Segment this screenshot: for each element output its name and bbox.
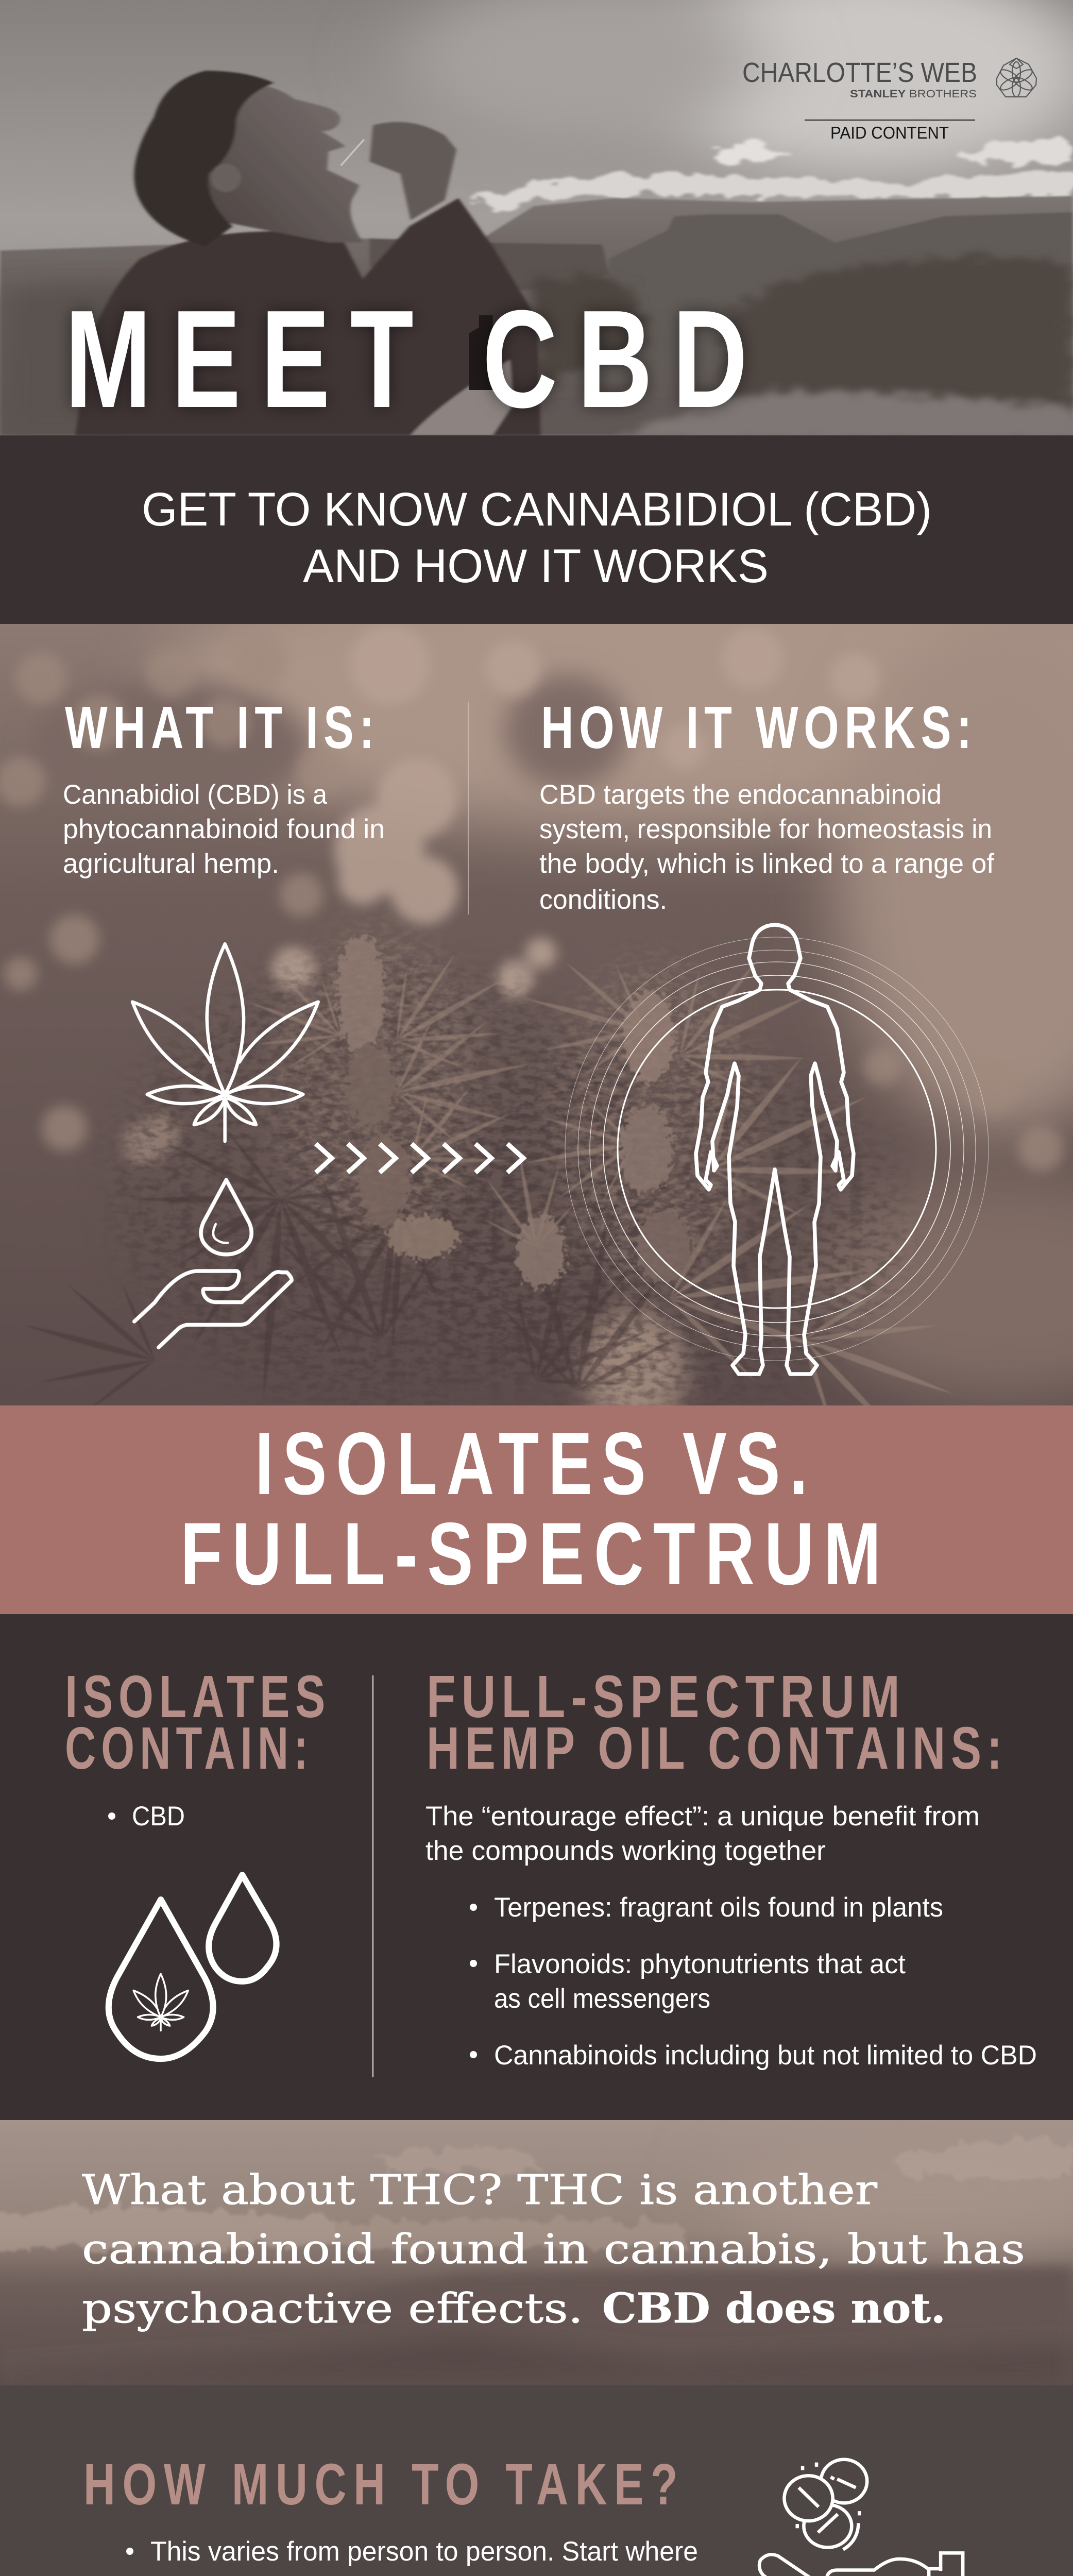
- panel: what about THC: cannabinoid found in cannabis, but has: [82, 2225, 1025, 2273]
- panel: what about THC: CBD does not.: [602, 2284, 946, 2332]
- heading: isolates contain: ISOLATES: [65, 1663, 331, 1730]
- heading: isolates contain: [65, 1663, 331, 1782]
- person silhouette: [75, 71, 541, 435]
- arrow: chevrons: [316, 1144, 523, 1173]
- text: what it is: agricultural hemp.: [63, 849, 279, 879]
- panel: hero photo: [0, 0, 1073, 440]
- text: entourage effect: The “entourage effect”: a unique benefit from: [425, 1801, 980, 1832]
- text: how it works: CBD targets the endocannabinoid: [539, 779, 942, 810]
- heading: isolates vs.: ISOLATES VS.: [255, 1414, 817, 1513]
- subtitle band: GET TO KNOW CANNABIDIOL (CBD): [142, 483, 932, 536]
- text: entourage effect: [425, 1801, 980, 1866]
- heading: full-spectrum: FULL-SPECTRUM: [180, 1504, 891, 1603]
- hemp plants: [113, 963, 649, 1406]
- text: what it is: Cannabidiol (CBD) is a: [63, 779, 327, 810]
- text: what it is: phytocannabinoid found in: [63, 814, 385, 844]
- panel: how much and how to take: [0, 2385, 1073, 2576]
- subtitle band: [0, 435, 1073, 624]
- bullet: how much: This varies from person to person. Start where: [150, 2536, 698, 2567]
- bullet: terpenes: Terpenes: fragrant oils found in plants: [494, 1892, 943, 1923]
- icon: Charlotte's Web emblem: [997, 58, 1036, 97]
- bullet: CBD: CBD: [132, 1801, 185, 1832]
- panel: what about THC: [0, 2120, 1073, 2385]
- panel: what about THC: What about THC? THC is another: [82, 2166, 878, 2214]
- logo: Charlotte's Web: [742, 57, 1036, 100]
- text: how it works: [539, 779, 994, 915]
- paid content label: PAID CONTENT: [830, 123, 949, 142]
- bullet: cannabinoids: Cannabinoids including but not limited to CBD: [494, 2040, 1037, 2071]
- title: MEET CBD: [65, 282, 768, 437]
- icon: human body with circles: [565, 925, 989, 1374]
- icon: oil drops with leaf: [109, 1875, 277, 2059]
- heading: full-spectrum hemp oil contains: [427, 1663, 1008, 1782]
- bullet: flavonoids: [470, 1949, 906, 2014]
- bullet: CBD: [108, 1801, 185, 1832]
- text: how it works: conditions.: [539, 885, 667, 915]
- heading: isolates contain: CONTAIN:: [65, 1715, 313, 1782]
- icon: oil drop in hand: [134, 1180, 292, 1347]
- bullet: flavonoids: as cell messengers: [494, 1984, 710, 2014]
- logo: Charlotte's Web: CHARLOTTE’S WEB: [742, 57, 977, 88]
- subtitle band: AND HOW IT WORKS: [303, 540, 769, 592]
- icon: pills over hand: [759, 2460, 963, 2576]
- text: what it is: [63, 779, 385, 879]
- heading: what it is: WHAT IT IS:: [65, 694, 380, 761]
- text: how it works: system, responsible for homeostasis in: [539, 814, 992, 844]
- panel: isolates vs full-spectrum banner: [0, 1405, 1073, 1614]
- panel: what it is / how it works photo: [0, 624, 1073, 1405]
- panel: isolates and full-spectrum details: [0, 1614, 1073, 2120]
- heading: full-spectrum hemp oil contains: FULL-SPECTRUM: [427, 1663, 906, 1730]
- panel: what about THC: psychoactive effects.: [82, 2284, 583, 2332]
- heading: how much to take: HOW MUCH TO TAKE?: [83, 2452, 685, 2517]
- bullet: flavonoids: Flavonoids: phytonutrients that act: [494, 1949, 906, 1979]
- text: entourage effect: the compounds working together: [425, 1836, 826, 1866]
- text: how it works: the body, which is linked to a range of: [539, 849, 994, 879]
- icon: hemp leaf: [132, 944, 318, 1141]
- logo: Charlotte's Web: STANLEY BROTHERS: [850, 88, 977, 100]
